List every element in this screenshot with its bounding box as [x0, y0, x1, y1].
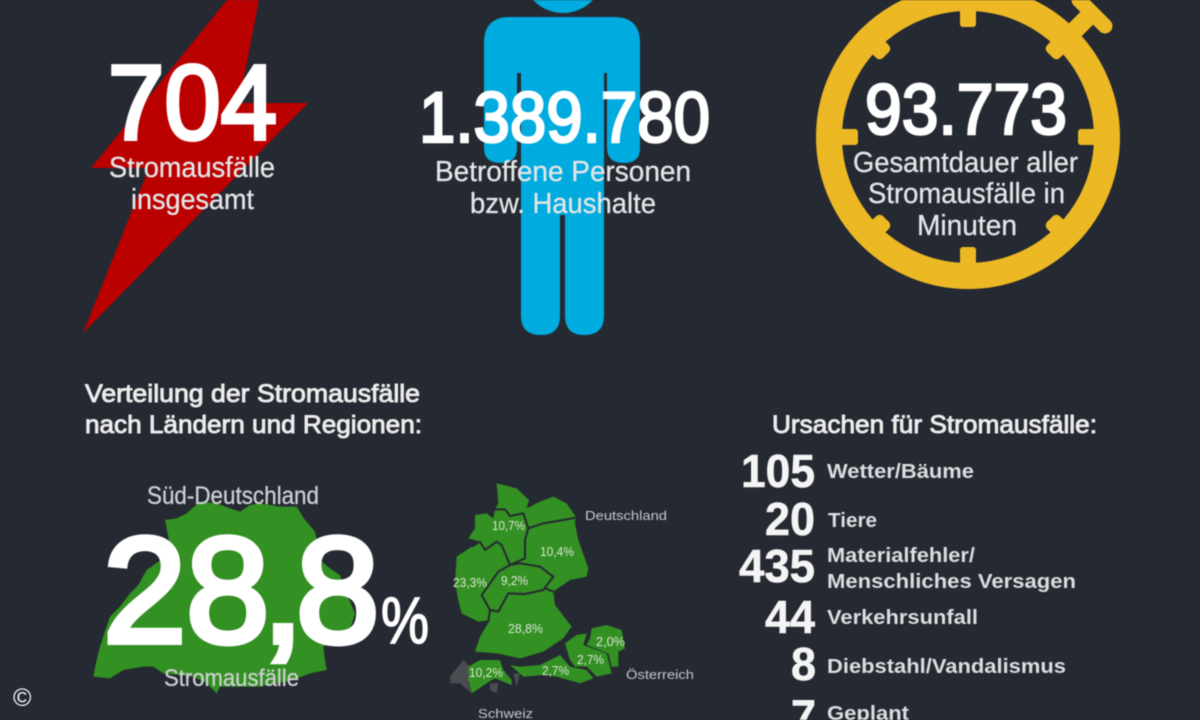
number: 28,8 percent: 28,8 [103, 506, 379, 674]
icon: South Germany map shape [93, 502, 355, 693]
caption: outages total [109, 152, 275, 216]
country labels [478, 508, 694, 720]
region percentages: 10,7% [492, 518, 525, 533]
icon: person [484, 0, 640, 335]
region percentages: 10,4% [540, 544, 574, 559]
region percentages [453, 518, 625, 680]
cause numbers: 435 [739, 540, 815, 592]
country labels: Deutschland [585, 508, 667, 523]
cause numbers: 20 [765, 493, 815, 545]
caption: affected persons or households: Betroffene Personen [435, 156, 691, 188]
cause labels: Tiere [828, 510, 877, 532]
number: 28,8 percent: % [381, 583, 429, 657]
number: 704: 704 [108, 44, 277, 162]
region percentages: 2,0% [596, 634, 625, 649]
icon: stopwatch [829, 0, 1107, 276]
caption: total duration in minutes: Minuten [917, 210, 1017, 242]
map regions [450, 483, 625, 693]
caption: affected persons or households [435, 156, 691, 220]
panel: causes of outages [739, 411, 1097, 720]
region percentages: 23,3% [453, 575, 487, 590]
chart: regional map [450, 483, 694, 720]
region percentages: 28,8% [508, 621, 543, 636]
cause labels [827, 461, 1076, 720]
icon: lightning bolt [83, 0, 308, 333]
heading: causes: Ursachen für Stromausfälle: [772, 411, 1097, 439]
panel: affected people [419, 0, 710, 335]
cause labels: Materialfehler/ [827, 545, 975, 567]
panel: South Germany highlight [93, 482, 429, 693]
cause labels: Verkehrsunfall [827, 607, 978, 629]
cause numbers: 44 [765, 591, 815, 643]
cause numbers: 8 [791, 638, 816, 690]
caption: total duration in minutes: Stromausfälle in [868, 178, 1065, 210]
number: 93.773: 93.773 [865, 71, 1067, 150]
caption: affected persons or households: bzw. Haushalte [470, 188, 656, 220]
number: 1.389.780: 1.389.780 [419, 79, 710, 158]
label: South Germany: Süd-Deutschland [147, 482, 319, 510]
cause labels: Menschliches Versagen [827, 571, 1076, 593]
heading: distribution by country [85, 380, 422, 439]
region percentages: 10,2% [469, 665, 503, 680]
cause labels: Wetter/Bäume [827, 461, 974, 483]
caption: total duration in minutes: Gesamtdauer aller [853, 147, 1078, 179]
heading: distribution by country: nach Ländern und Regionen: [85, 411, 422, 439]
cause numbers: 105 [741, 445, 815, 497]
panel: total outages [83, 0, 308, 333]
cause numbers [739, 445, 816, 720]
copyright mark: © [13, 684, 32, 712]
region percentages: 2,7% [542, 663, 569, 678]
caption: outages total: Stromausfälle [109, 152, 275, 184]
cause labels: Diebstahl/Vandalismus [827, 656, 1066, 678]
caption: outages total: insgesamt [131, 184, 254, 216]
region percentages: 9,2% [501, 573, 528, 588]
panel: total duration [829, 0, 1107, 276]
heading: distribution by country: Verteilung der Stromausfälle [85, 380, 420, 408]
region percentages: 2,7% [577, 652, 604, 667]
label: outages: Stromausfälle [164, 665, 299, 692]
caption: total duration in minutes [853, 147, 1078, 242]
country labels: Österreich [626, 667, 694, 682]
